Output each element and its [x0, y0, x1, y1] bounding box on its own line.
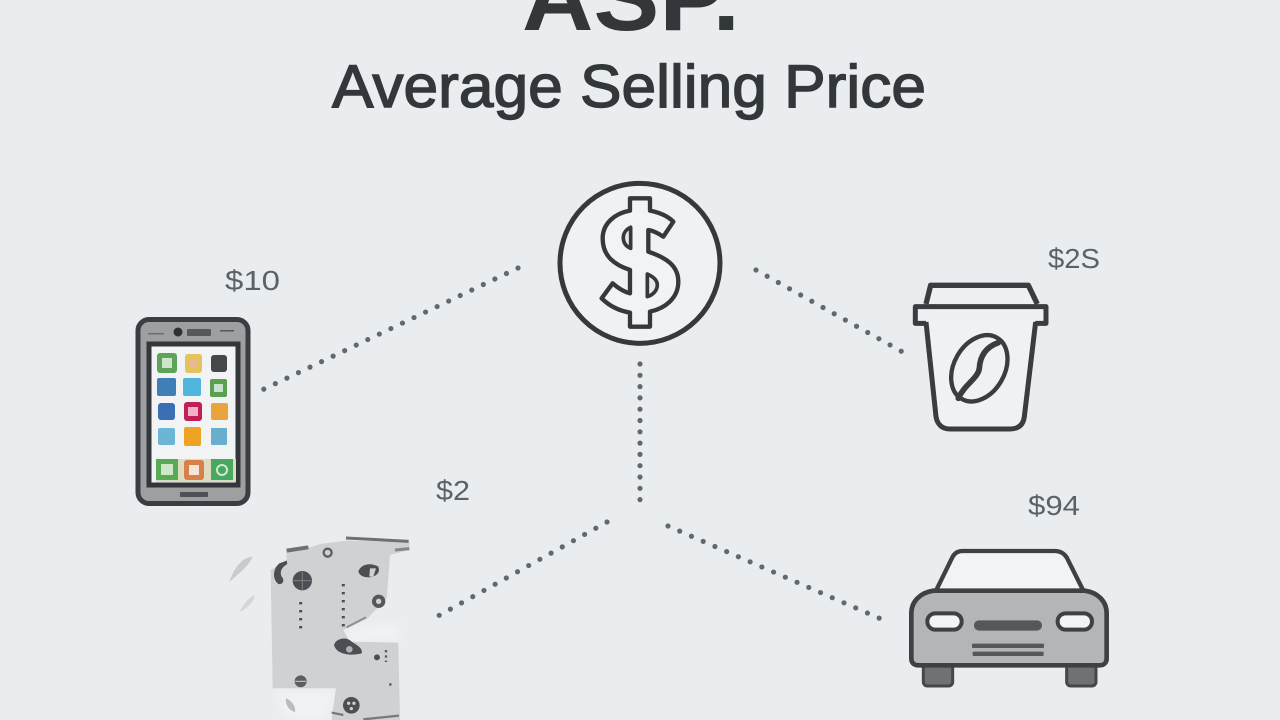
icon: circuit board [229, 538, 409, 720]
icon: dollar coin [560, 183, 720, 343]
icon: car [911, 551, 1107, 686]
subtitle: Average Selling Price [332, 53, 926, 120]
price label: coffee cup: $2S [1048, 243, 1100, 274]
icon: smartphone [138, 320, 248, 504]
price label: car: $94 [1028, 490, 1080, 521]
connector: junction to circuit board [438, 522, 607, 616]
price label: phone: $10 [225, 265, 280, 296]
connector: junction to car [668, 526, 888, 622]
connector: center to coffee cup [756, 270, 908, 355]
icon: coffee cup [915, 285, 1046, 429]
connector: center downward [637, 364, 643, 500]
connector: center to phone [262, 268, 518, 390]
price label: circuit board: $2 [436, 475, 470, 506]
